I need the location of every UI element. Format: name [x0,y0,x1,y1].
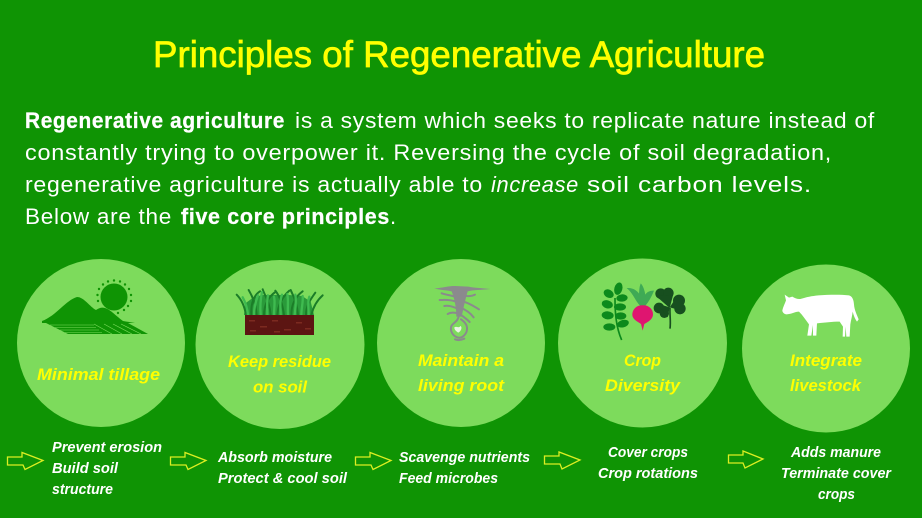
intro text block: increase [491,172,579,197]
intro text block: Below are the [25,204,172,229]
panel: keep residue on soil [196,260,364,429]
text: living root benefits: Scavenge nutrients [399,449,530,466]
text: livestock benefits: Adds manure [790,444,881,461]
arrow 3 [356,452,391,470]
text: crop diversity benefits [598,444,698,482]
text: keep residue benefits [217,449,348,487]
label: minimal tillage: Minimal tillage [37,365,160,384]
arrow 1 [8,452,43,470]
label: keep residue on soil [228,352,331,396]
icon: leaves, radish and clover [601,282,686,340]
icon: hills, field and sun [42,279,148,334]
label: keep residue on soil: Keep residue [228,352,331,371]
text: living root benefits [399,449,530,487]
label: integrate livestock: livestock [790,376,863,395]
intro text block: constantly trying to overpower it. Reversing the cycle of soil degradation, [25,140,832,165]
label: maintain a living root: living root [418,376,505,395]
label: crop diversity [605,351,682,395]
text: living root benefits: Feed microbes [399,470,498,487]
panel: crop diversity [558,258,727,428]
intro text block: five core principles [181,204,390,229]
label: crop diversity: Diversity [605,376,682,395]
label: integrate livestock: Integrate [790,351,862,370]
icon: grass on soil block [237,289,323,335]
label: maintain a living root [418,351,505,395]
icon: cow [782,295,859,337]
arrow 2 [170,452,206,470]
text: livestock benefits: crops [818,486,855,503]
label: maintain a living root: Maintain a [418,351,504,370]
panel: minimal tillage [17,259,185,427]
intro text block: Regenerative agriculture [25,108,285,133]
text: minimal tillage benefits: structure [52,481,113,498]
text: keep residue benefits: Protect & cool soil [218,470,348,487]
intro text block: soil carbon levels. [587,172,812,197]
intro text block: is a system which seeks to replicate nature instead of [295,108,875,133]
text: crop diversity benefits: Cover crops [608,444,688,461]
title: Principles of Regenerative Agriculture [153,34,765,75]
intro text block: . [390,204,397,229]
text: keep residue benefits: Absorb moisture [217,449,332,466]
icon: root [434,286,490,340]
panel: integrate livestock [742,264,910,432]
text: minimal tillage benefits: Build soil [52,460,119,477]
text: crop diversity benefits: Crop rotations [598,465,698,482]
text: livestock benefits [781,444,892,503]
arrow 4 [544,452,580,469]
label: crop diversity: Crop [624,351,661,370]
text: livestock benefits: Terminate cover [781,465,892,482]
label: integrate livestock [790,351,863,395]
label: keep residue on soil: on soil [253,378,308,396]
intro text block [25,108,875,229]
intro text block: regenerative agriculture is actually able to [25,172,483,197]
arrow 5 [728,451,763,468]
text: minimal tillage benefits: Prevent erosion [52,439,162,456]
text: minimal tillage benefits [52,439,162,498]
panel: maintain a living root [377,259,545,427]
